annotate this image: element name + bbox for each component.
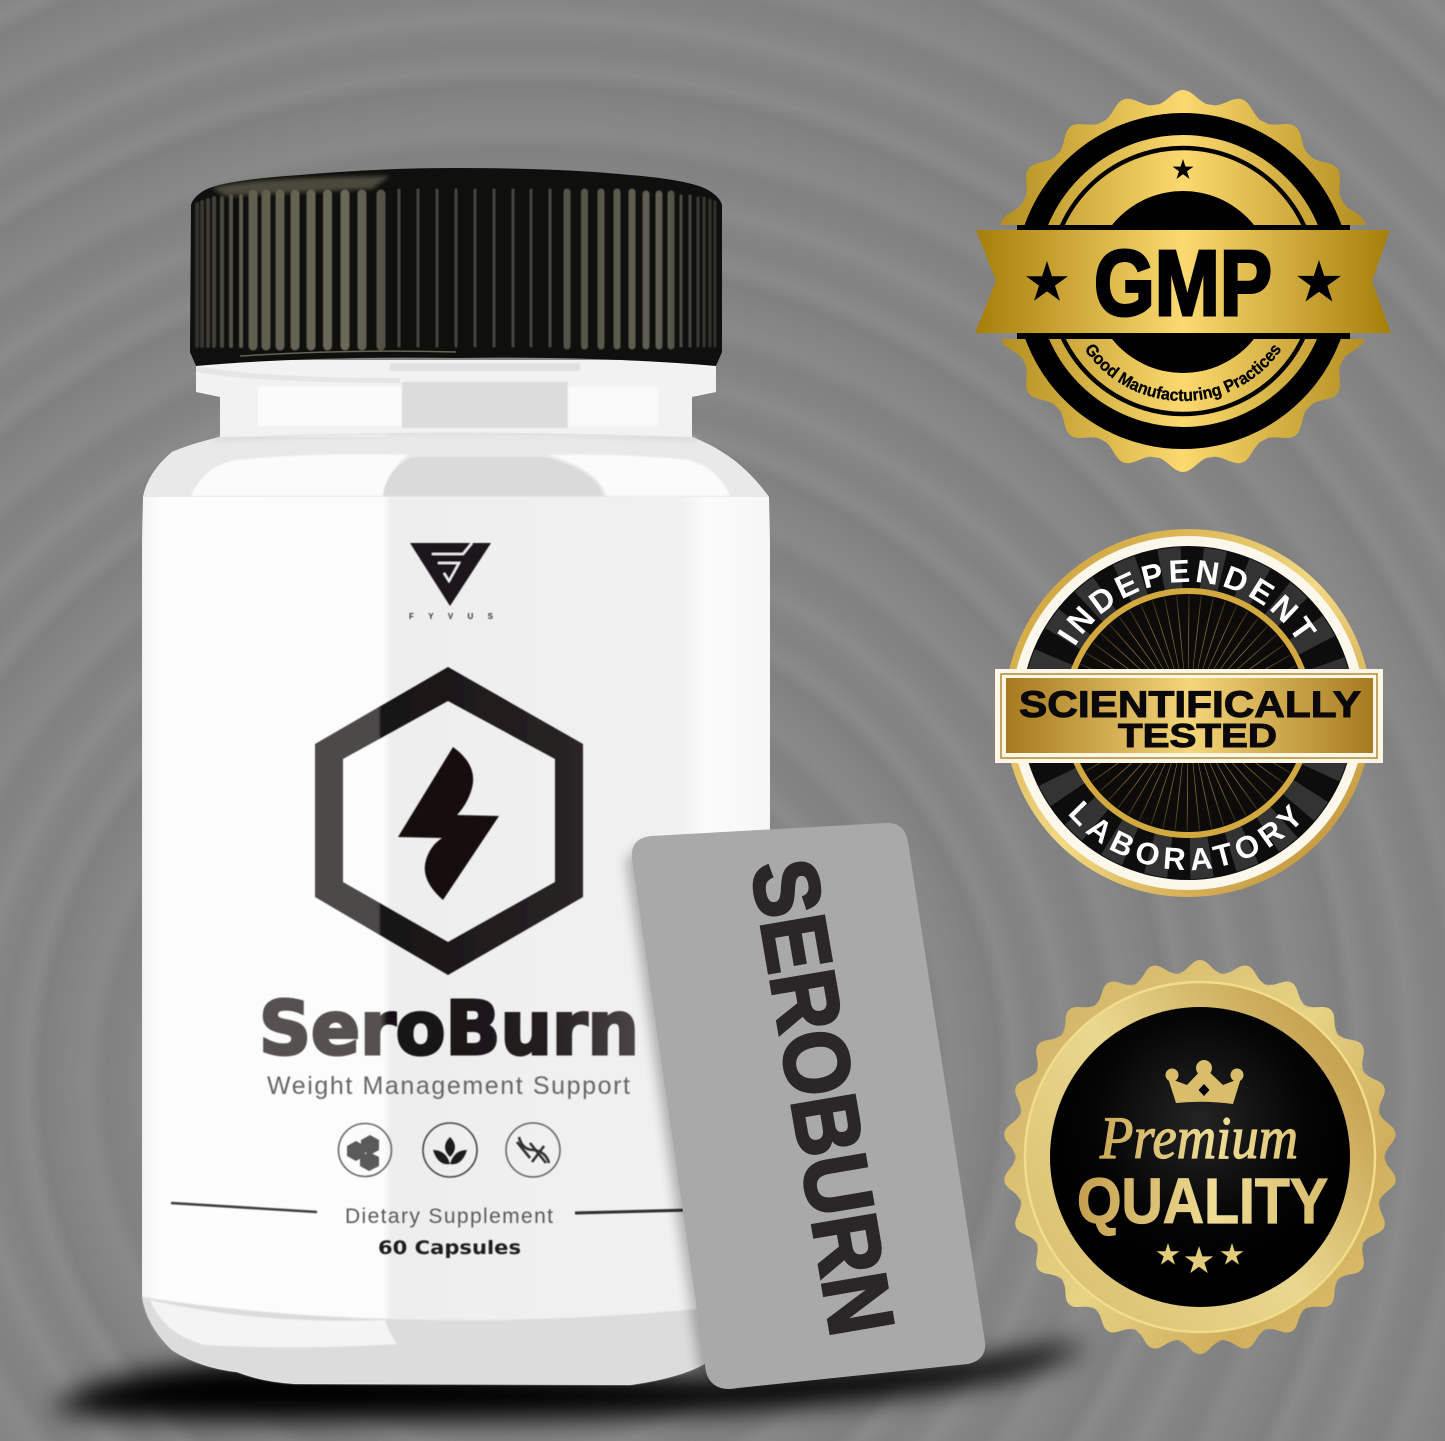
icon: crown: [1166, 1060, 1244, 1104]
plaque: [995, 669, 1383, 763]
inner rim: [1025, 982, 1375, 1332]
plaque line 1: SCIENTIFICALLY: [1019, 684, 1361, 725]
bottle label: [171, 543, 690, 1259]
floor shadow under bottle and card: [50, 1342, 1081, 1421]
independent text: INDEPENDENT: [1057, 560, 1317, 646]
black disc: [1050, 1007, 1350, 1307]
icon: leaves: [423, 1123, 477, 1177]
quality text: QUALITY: [1077, 1165, 1328, 1237]
neck and collar: [196, 360, 716, 437]
dietary supplement text: Dietary Supplement: [345, 1205, 553, 1228]
plaque line 2: TESTED: [1118, 717, 1277, 754]
bottle body: [142, 395, 770, 1385]
premium script: Premium: [1099, 1105, 1298, 1171]
band behind ribbon: [1017, 225, 1350, 339]
ribbon: [975, 230, 1391, 333]
card shadow: [626, 840, 722, 1372]
badge: GMP: [975, 90, 1391, 472]
divider right: [575, 1210, 690, 1213]
white ring: [1011, 536, 1365, 890]
rays: [1129, 654, 1247, 772]
icon: helix: [506, 1123, 560, 1177]
card shape: [632, 823, 985, 1389]
bottom reflection: [142, 1297, 735, 1385]
gold rim: [1004, 529, 1372, 897]
product bottle: [142, 168, 770, 1385]
GMP text: GMP: [1094, 231, 1272, 335]
inner gold ring: [1066, 591, 1310, 835]
product name: SeroBurn: [259, 986, 639, 1072]
curved caption: Good Manufacturing Practices: [1086, 344, 1280, 402]
divider left: [171, 1203, 317, 1212]
shoulder shading: [143, 430, 769, 497]
band segments: [1043, 568, 1333, 858]
hexagon bolt emblem: [315, 667, 583, 975]
cap: [190, 168, 722, 366]
dark band: [1021, 546, 1355, 880]
laboratory text: LABORATORY: [1068, 800, 1299, 870]
stars: [1157, 1243, 1243, 1273]
scalloped seal: [1000, 957, 1400, 1357]
cap top gloss: [212, 176, 390, 196]
tagline: Weight Management Support: [267, 1072, 630, 1100]
brand logo: FYVUS: FYVUS: [409, 612, 494, 621]
capsule count: 60 Capsules: [378, 1237, 521, 1259]
card text: SEROBURN: [731, 852, 913, 1343]
badge: premium quality: [1000, 957, 1400, 1357]
seal: [1000, 90, 1366, 472]
icon: cubes: [338, 1124, 392, 1176]
grey card: [626, 823, 985, 1389]
cap ribs: [197, 190, 715, 346]
stars: [1026, 159, 1341, 302]
badge: scientifically tested: [995, 529, 1383, 897]
brand logo: FYVUS: [409, 543, 494, 621]
